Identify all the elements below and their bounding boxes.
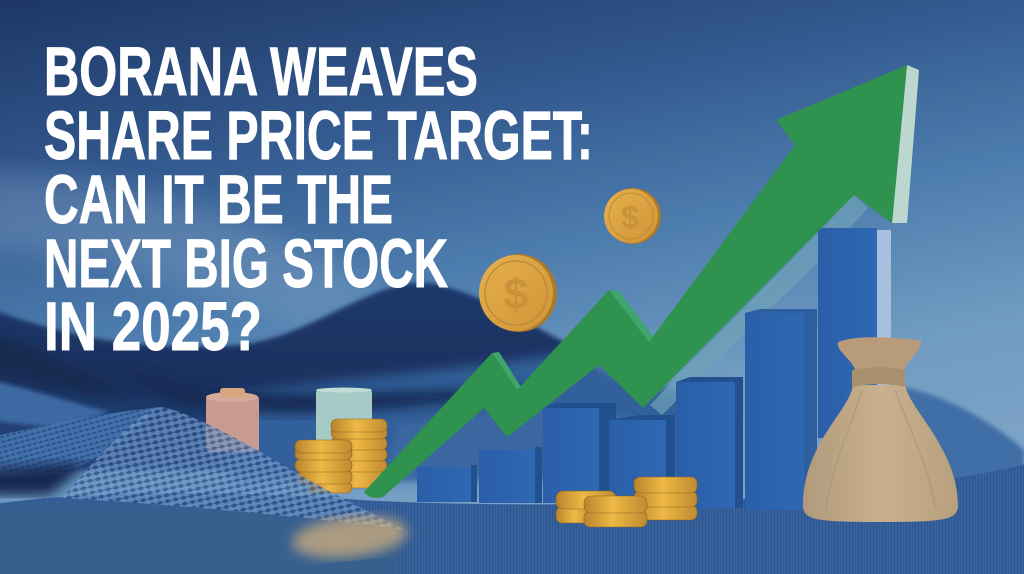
background fabric folds <box>0 175 1024 500</box>
bar 2 <box>479 447 542 503</box>
mesh fabric drape <box>62 407 405 530</box>
bar 6 <box>745 309 817 510</box>
spool: mint thread <box>316 388 372 442</box>
coin stack: front centre <box>556 491 647 527</box>
arrow shadow <box>650 195 868 415</box>
bar 7 <box>818 228 891 438</box>
title: BORANA WEAVES <box>44 33 478 110</box>
bar 5 <box>676 377 743 508</box>
arrow 3D edge <box>492 290 654 392</box>
floating coin: large: $ <box>504 270 528 319</box>
money sack <box>803 337 958 522</box>
bar 3 <box>543 403 616 503</box>
title: SHARE PRICE TARGET: <box>44 97 593 174</box>
floor surface <box>0 462 1024 574</box>
title: CAN IT BE THE <box>44 161 393 238</box>
upward green arrow <box>364 65 919 498</box>
bar chart <box>417 228 891 510</box>
floating coin: large <box>479 254 557 332</box>
arrow body <box>364 65 907 498</box>
floating coin: small: $ <box>621 199 639 235</box>
coin stack: rear left <box>331 419 387 488</box>
coin stack: front left <box>295 440 352 493</box>
spool: pink thread <box>206 388 259 452</box>
light reflection on floor <box>290 511 410 563</box>
bar 4 <box>609 415 675 503</box>
title: NEXT BIG STOCK <box>44 225 448 302</box>
title: IN 2025? <box>44 288 262 365</box>
bar 1 <box>417 465 477 502</box>
coin stack: front right <box>634 477 697 520</box>
floating coin: small <box>604 188 661 244</box>
